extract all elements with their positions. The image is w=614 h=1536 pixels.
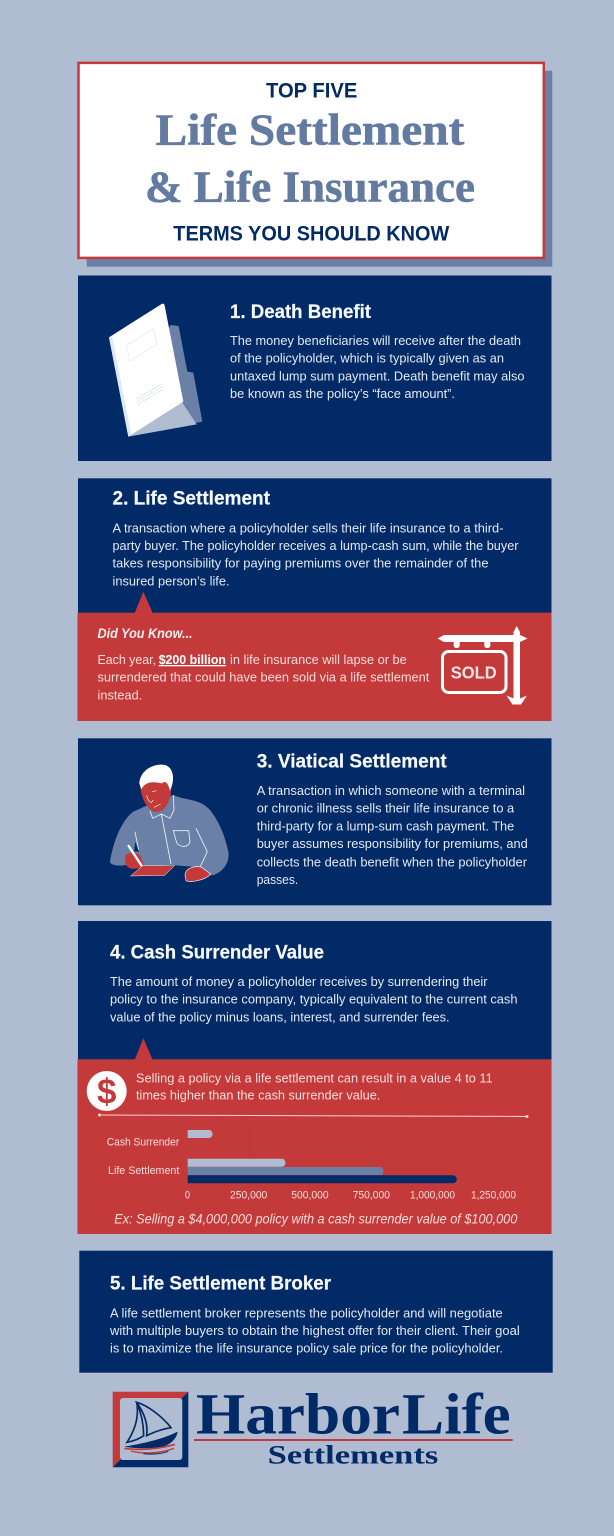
heading: life settlement: Life Settlement [156, 105, 465, 154]
text: death benefit definition [230, 333, 524, 401]
text: cash surrender definition: The amount of money a policyholder receives by surrendering their [110, 974, 488, 989]
callout: life settlement value comparison [78, 1038, 552, 1234]
text: example caption: Ex: Selling a $4,000,000 policy with a cash surrender value of $100,000 [114, 1210, 517, 1226]
callout: did you know [78, 592, 552, 721]
text: viatical settlement definition: passes. [257, 872, 298, 887]
heading: top five: TOP FIVE [266, 79, 357, 103]
bar chart: cash surrender vs life settlement: 750,000 [353, 1190, 390, 1202]
icon: sold sign: SOLD [451, 663, 497, 683]
panel: cash surrender value [78, 921, 552, 1060]
text: life settlement definition: party buyer. The policyholder receives a lump-cash sum, while the buyer [112, 538, 519, 553]
icon: folder with document [109, 304, 202, 437]
icon: sailboat emblem [113, 1392, 188, 1467]
wordmark: HarborLife: Harbor [196, 1381, 400, 1446]
icon: dollar sign: $ [97, 1072, 116, 1112]
panel: viatical settlement [78, 738, 552, 905]
text: viatical settlement definition: collects the death benefit when the policyholder [257, 854, 528, 869]
text: cash surrender definition [110, 974, 518, 1024]
text: death benefit definition: of the policyholder, which is typically given as an [230, 351, 504, 366]
icon: dollar sign [87, 1071, 127, 1112]
bar chart: cash surrender vs life settlement: 1,000,000 [410, 1190, 455, 1202]
wordmark: Settlements: Settlements [268, 1440, 438, 1469]
text: death benefit definition: The money beneficiaries will receive after the death [230, 333, 521, 348]
text: broker definition [109, 1305, 520, 1356]
heading: and life insurance: & Life Insurance [145, 163, 475, 212]
text: death benefit definition: untaxed lump sum payment. Death benefit may also [230, 368, 524, 383]
bar chart: cash surrender vs life settlement: Cash Surrender [107, 1137, 180, 1149]
panel: life settlement [78, 478, 552, 613]
heading: 1. death benefit: 1. Death Benefit [230, 301, 371, 323]
text: death benefit definition: be known as the policy’s “face amount”. [230, 386, 455, 401]
heading: 2. life settlement: 2. Life Settlement [112, 487, 270, 509]
text: lapse statistic: surrendered that could have been sold via a life settlement [98, 670, 430, 685]
text: viatical settlement definition: third-party for a lump-sum cash payment. The [257, 818, 514, 833]
text: life settlement definition [112, 520, 519, 588]
text: value multiple: Selling a policy via a life settlement can result in a value 4 to 11 [136, 1070, 493, 1085]
icon: man signing document [110, 765, 229, 881]
text: lapse statistic: $200 billion [159, 652, 226, 667]
bar chart: cash surrender vs life settlement: 500,000 [291, 1190, 329, 1202]
text: lapse statistic [98, 652, 430, 702]
heading: did you know: Did You Know... [98, 625, 192, 641]
text: lapse statistic: in life insurance will lapse or be [230, 652, 407, 667]
text: broker definition: A life settlement broker represents the policyholder and will negotiate [110, 1305, 503, 1320]
bar chart: cash surrender vs life settlement: 0 [185, 1190, 190, 1202]
logo: HarborLife Settlements [113, 1381, 513, 1469]
heading: 5. life settlement broker: 5. Life Settlement Broker [110, 1272, 331, 1294]
text: cash surrender definition: policy to the insurance company, typically equivalent to the current cash [110, 992, 518, 1007]
text: viatical settlement definition: or chronic illness sells their life insurance to a [257, 801, 515, 816]
icon: sold sign [438, 626, 528, 704]
text: viatical settlement definition [257, 783, 528, 887]
text: viatical settlement definition: buyer assumes responsibility for premiums, and [257, 836, 528, 851]
panel: life settlement broker [79, 1251, 553, 1373]
text: broker definition: with multiple buyers to obtain the highest offer for their client. Their goal [109, 1323, 520, 1338]
text: value multiple: times higher than the cash surrender value. [136, 1088, 380, 1103]
title panel [78, 63, 552, 267]
heading: 3. viatical settlement: 3. Viatical Settlement [257, 751, 447, 773]
text: lapse statistic: instead. [98, 687, 142, 702]
panel: death benefit [78, 276, 552, 461]
bar chart: cash surrender vs life settlement [107, 1125, 516, 1202]
text: viatical settlement definition: A transaction in which someone with a terminal [257, 783, 525, 798]
text: life settlement definition: insured person’s life. [112, 573, 230, 588]
text: life settlement definition: A transaction where a policyholder sells their life insurance to a third- [112, 520, 504, 535]
heading: 4. cash surrender value: 4. Cash Surrender Value [110, 941, 324, 963]
bar chart: cash surrender vs life settlement: 250,000 [230, 1190, 267, 1202]
wordmark: HarborLife: Life [402, 1381, 511, 1446]
text: broker definition: is to maximize the life insurance policy sale price for the policyholder. [110, 1341, 503, 1356]
wordmark: HarborLife [196, 1381, 511, 1446]
text: cash surrender definition: value of the policy minus loans, interest, and surrender fees. [110, 1009, 450, 1024]
heading: terms you should know: TERMS YOU SHOULD KNOW [173, 222, 450, 246]
text: lapse statistic: Each year, [98, 652, 156, 667]
bar chart: cash surrender vs life settlement: 1,250,000 [471, 1190, 516, 1202]
text: value multiple [136, 1070, 493, 1103]
text: life settlement definition: takes responsibility for paying premiums over the remainder of the [112, 556, 488, 571]
bar chart: cash surrender vs life settlement: Life Settlement [108, 1165, 179, 1177]
